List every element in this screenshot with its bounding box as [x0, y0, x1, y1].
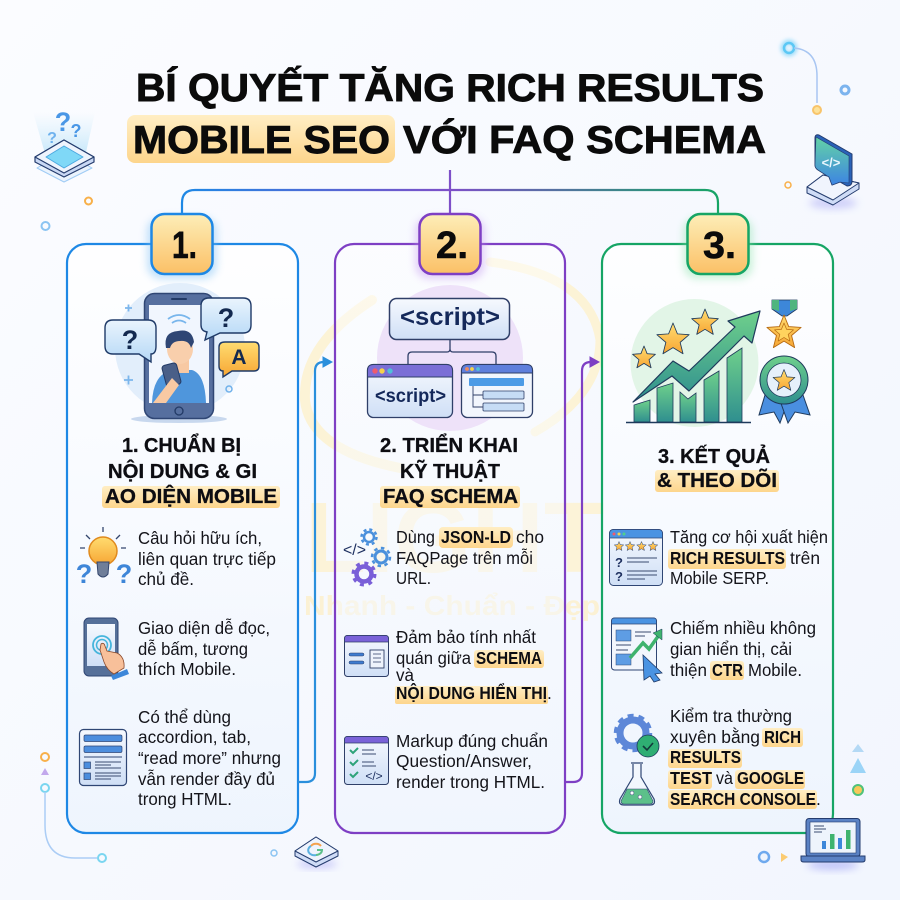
title — [127, 66, 766, 163]
icon: google platform — [295, 837, 338, 868]
item 1.3 — [80, 707, 281, 809]
window: tree — [462, 364, 532, 418]
speech bubble: question left — [105, 320, 156, 362]
text block: Mobile SERP. — [670, 568, 769, 588]
watermark: Nhanh - Chuẩn - Đẹp — [304, 590, 600, 621]
text block: cho — [516, 527, 544, 547]
heading 1: NỘI DUNG & GI — [108, 459, 257, 483]
text block: Giao diện dễ đọc, — [138, 617, 270, 638]
title: VỚI FAQ SCHEMA — [403, 118, 766, 162]
text block — [668, 706, 821, 809]
text block: gian hiển thị, cải — [670, 639, 792, 659]
item 2.3 — [344, 731, 548, 792]
speech bubble: question left: ? — [122, 325, 138, 355]
text block: URL. — [396, 568, 431, 588]
text block — [395, 627, 552, 704]
badge 3: 3. — [703, 225, 736, 267]
text block: trên — [790, 548, 820, 568]
window: script: <script> — [375, 386, 446, 407]
text block: thiện — [670, 660, 707, 680]
text block: dễ bấm, tương — [138, 638, 248, 659]
item 3.3 — [616, 706, 821, 809]
heading 3: & THEO DÕI — [657, 468, 777, 492]
text block: xuyên bằng — [670, 726, 760, 747]
speech bubble: question right: ? — [218, 303, 234, 333]
text block: Kiểm tra thường — [670, 706, 792, 726]
badge 2: 2. — [436, 225, 468, 267]
heading 2: KỸ THUẬT — [400, 459, 500, 483]
icon: accordion list — [80, 730, 126, 786]
speech bubble: answer: A — [231, 346, 247, 369]
icon: checklist window: </> — [365, 769, 383, 783]
window: script — [368, 364, 452, 418]
text block: Câu hỏi hữu ích, — [138, 528, 262, 548]
text block: thích Mobile. — [138, 659, 236, 679]
decoration: shapes bottom-right — [759, 744, 866, 862]
panel 1: chuẩn bị — [67, 214, 298, 833]
text block: “read more” nhưng — [138, 748, 281, 768]
text block — [138, 617, 270, 679]
arrow: panel 1 to panel 2 — [298, 357, 332, 782]
text block — [670, 618, 816, 680]
heading 3: 3. KẾT QUẢ — [658, 445, 770, 468]
panel 3: kết quả — [602, 214, 833, 833]
text block: Có thể dùng — [138, 707, 231, 727]
icon: gear check and flask — [616, 716, 659, 805]
text block: . — [816, 789, 821, 809]
icon: growth window and cursor — [612, 618, 662, 682]
icon: rich result stars: ? — [615, 569, 623, 584]
badge 1 — [147, 214, 217, 279]
heading 1: AO DIỆN MOBILE — [105, 484, 277, 508]
text block: GOOGLE — [737, 768, 804, 788]
decoration: code bubble top-right: </> — [822, 155, 841, 170]
heading 2 — [380, 434, 520, 508]
decoration: question platform top-left: ? — [55, 107, 71, 137]
text block: FAQPage trên mỗi — [396, 547, 533, 568]
text block: Đảm bảo tính nhất — [396, 627, 536, 647]
illustration: script tree — [368, 285, 532, 431]
speech bubble: answer — [219, 342, 259, 377]
text block: vẫn render đầy đủ — [138, 768, 275, 789]
text block: liên quan trực tiếp — [138, 549, 276, 569]
text block: SEARCH CONSOLE — [670, 789, 816, 809]
heading 1: 1. CHUẨN BỊ — [122, 434, 241, 457]
decoration: circuit top-right — [783, 42, 849, 188]
title: BÍ QUYẾT TĂNG RICH RESULTS — [136, 66, 764, 110]
text block: JSON-LD — [441, 527, 511, 547]
text block: quán giữa — [396, 648, 471, 668]
watermark — [304, 262, 605, 621]
text block: và — [396, 665, 414, 685]
illustration: script tree: <script> — [400, 303, 500, 331]
text block: . — [547, 683, 552, 703]
arrow: panel 2 to panel 3 — [565, 357, 599, 782]
decoration: circuit bottom-left — [41, 753, 277, 862]
item 1.2 — [84, 617, 270, 680]
text block: Markup đúng chuẩn — [396, 731, 548, 751]
decoration: question platform top-left: ? — [70, 121, 82, 141]
icon: rich result stars — [610, 530, 662, 586]
text block: TEST — [670, 768, 712, 788]
text block: Tăng cơ hội xuất hiện — [670, 527, 828, 547]
medal — [767, 300, 801, 348]
icon: rich result stars: ? — [615, 555, 623, 570]
icon: laptop chart — [801, 818, 865, 870]
text block: NỘI DUNG HIỂN THỊ — [396, 682, 547, 703]
icon: light bulb with question marks: ? — [76, 559, 92, 589]
text block: Mobile. — [748, 660, 802, 680]
text block: Chiếm nhiều không — [670, 618, 816, 638]
icon: gears and code: </> — [343, 542, 366, 559]
text block: và — [716, 768, 733, 788]
decoration: question platform top-left — [33, 107, 95, 182]
decoration: question platform top-left: ? — [47, 130, 57, 147]
icon: light bulb with question marks — [76, 527, 132, 589]
text block: accordion, tab, — [138, 727, 251, 747]
title: MOBILE SEO — [133, 119, 390, 162]
badge 2 — [415, 214, 485, 279]
panel 2: triển khai — [335, 214, 565, 833]
item 1.1 — [76, 527, 276, 589]
icon: content window — [344, 636, 388, 676]
text block: chủ đề. — [138, 569, 194, 589]
text block: RICH — [764, 727, 801, 747]
text block: Dùng — [396, 527, 435, 547]
item 2.2 — [344, 627, 552, 704]
rosette — [759, 356, 810, 423]
text block — [396, 731, 548, 792]
text block: RESULTS — [670, 747, 741, 767]
icon: tapping phone — [84, 618, 129, 680]
decoration: rings left — [42, 198, 92, 230]
icon: checklist window — [344, 736, 388, 784]
item 3.2 — [612, 618, 816, 682]
heading 2: FAQ SCHEMA — [383, 486, 518, 508]
heading 3 — [655, 445, 779, 492]
text block: trong HTML. — [138, 789, 232, 809]
badge 3 — [683, 214, 753, 279]
decoration: code bubble top-right — [807, 135, 859, 209]
heading 1 — [102, 434, 280, 508]
watermark: LIGHT — [305, 482, 605, 594]
illustration: growth chart and awards — [626, 299, 810, 427]
text block — [138, 528, 276, 589]
speech bubble: question right — [201, 298, 251, 340]
text block: RICH RESULTS — [670, 548, 785, 568]
icon: light bulb with question marks: ? — [116, 559, 132, 589]
text block — [668, 527, 828, 588]
text block: CTR — [712, 660, 743, 680]
connector: title to steps — [182, 170, 718, 214]
text block — [396, 527, 544, 588]
text block — [138, 707, 281, 809]
item 3.1 — [610, 527, 828, 588]
badge 1: 1. — [172, 225, 197, 267]
text block: render trong HTML. — [396, 772, 545, 792]
item 2.1 — [343, 527, 544, 588]
text block: SCHEMA — [476, 648, 542, 668]
text block: Question/Answer, — [396, 751, 532, 771]
icon: gears and code — [343, 530, 390, 585]
heading 2: 2. TRIỂN KHAI — [380, 434, 518, 457]
illustration: phone with question bubbles — [105, 283, 259, 423]
